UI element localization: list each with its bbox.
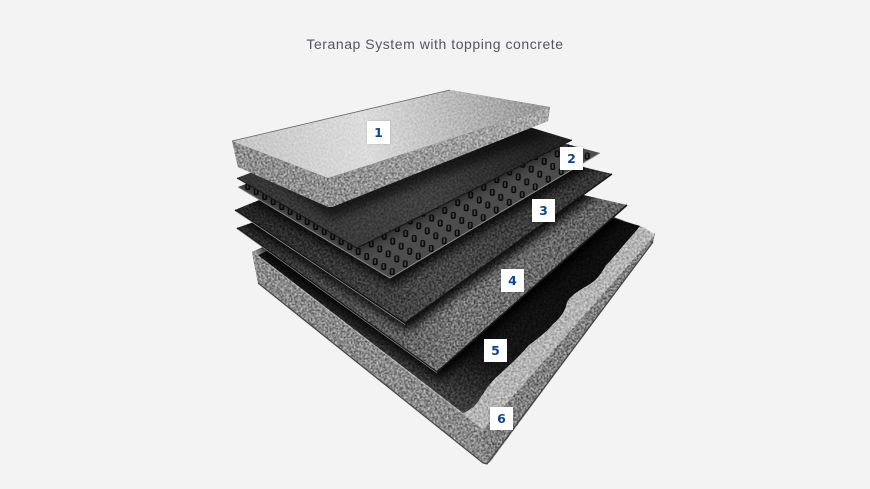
layer 6: concrete base: [252, 160, 655, 464]
label 3: 3: [539, 203, 548, 218]
layer 3: drainage fleece: [234, 167, 612, 336]
layer 4: protection sheet: [236, 195, 628, 382]
layer 5: black bitumen membrane: [258, 170, 640, 413]
label 5: [484, 339, 507, 362]
layer 2: dimpled drainage sheet with fabric: [236, 128, 600, 290]
label 2: [560, 147, 583, 170]
label 1: [367, 121, 390, 144]
label 6: 6: [497, 411, 506, 426]
label 2: 2: [567, 151, 576, 166]
layered roof system illustration: [232, 90, 655, 465]
label 4: [501, 269, 524, 292]
label 1: 1: [374, 125, 383, 140]
label 5: 5: [491, 343, 500, 358]
label 4: 4: [508, 273, 517, 288]
layer 1: topping concrete slab: [232, 90, 552, 219]
title: Teranap System with topping concrete: [306, 36, 564, 52]
label 3: [532, 199, 555, 222]
label 6: [490, 407, 513, 430]
